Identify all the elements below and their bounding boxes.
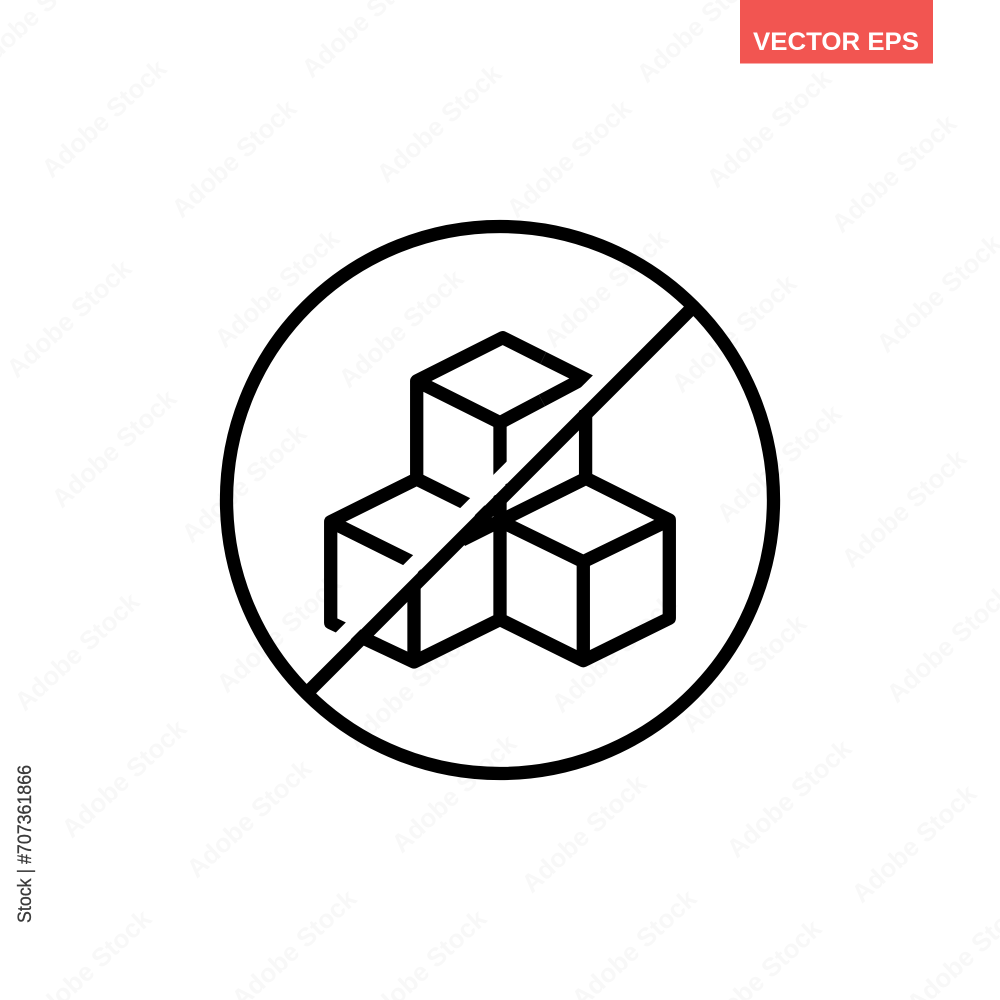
watermark pattern: Adobe Stock [9,586,146,717]
watermark pattern: Adobe Stock [209,223,346,354]
watermark pattern: Adobe Stock [211,568,348,699]
icon: three stacked cubes [331,338,669,662]
outer circle [226,226,774,774]
watermark pattern: Adobe Stock [56,713,193,844]
watermark pattern: Adobe Stock [676,608,813,739]
watermark pattern: Adobe Stock [666,268,803,399]
watermark pattern: Adobe Stock [386,728,523,859]
watermark pattern: Adobe Stock [516,768,653,899]
watermark pattern: Adobe Stock [36,53,173,184]
icon: crossed-out sugar cubes [226,226,774,774]
watermark pattern: Adobe Stock [836,443,973,574]
watermark pattern: Adobe Stock [846,778,983,909]
badge: vector eps [740,0,933,64]
watermark pattern: Adobe Stock [701,63,838,194]
watermark pattern: Adobe Stock [181,753,318,884]
watermark pattern: Adobe Stock [826,108,963,239]
watermark pattern: Adobe Stock [46,383,183,514]
watermark pattern: Adobe Stock [333,263,470,394]
slash [308,308,692,692]
stock number side text: Stock | #707361866 [15,765,36,923]
watermark pattern: Adobe Stock [721,733,858,864]
watermark pattern: Adobe Stock [166,93,303,224]
watermark pattern: Adobe Stock [546,588,683,719]
watermark pattern: Adobe Stock [371,58,508,189]
watermark pattern: Adobe Stock [538,223,675,354]
watermark pattern: Adobe Stock [176,418,313,549]
watermark pattern: Adobe Stock [501,93,638,224]
watermark pattern: Adobe Stock [711,398,848,529]
white gap beside slash [285,285,705,685]
watermark pattern: Adobe Stock [1,253,138,384]
watermark pattern: Adobe Stock [341,623,478,754]
badge: vector eps: VECTOR EPS [753,28,919,56]
